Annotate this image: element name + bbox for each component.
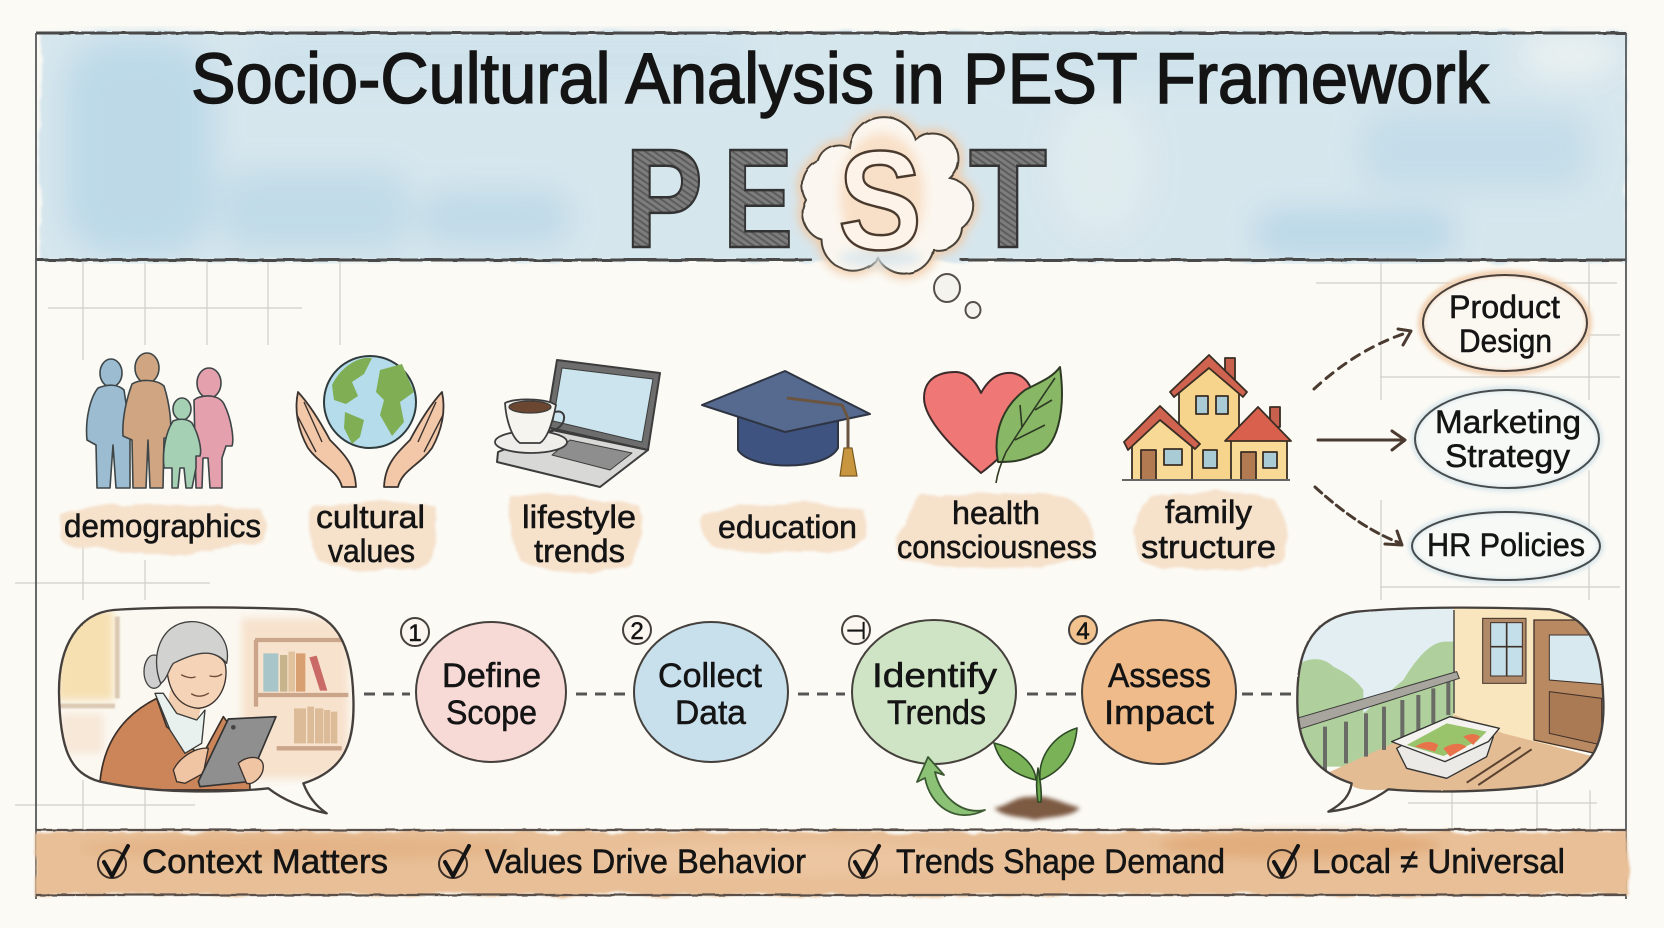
window: [1483, 618, 1526, 683]
cloud glow: [802, 117, 973, 274]
outcome: marketing strategy: Marketing: [1435, 404, 1581, 440]
icon: growth arrow: [917, 757, 985, 815]
cap board: [702, 371, 870, 432]
cup: [505, 399, 556, 443]
badge 1: 1: [408, 620, 422, 647]
outcome: hr policies: [1411, 511, 1601, 581]
step 2: collect data: Collect: [658, 657, 763, 695]
label: health consciousness: consciousness: [897, 529, 1097, 565]
step 1: define scope: Define: [442, 657, 541, 695]
laptop base: [497, 430, 648, 487]
outcome: product design: Design: [1459, 323, 1552, 359]
step 3: identify trends: [842, 616, 1016, 764]
bun and hair: [144, 655, 164, 688]
letter E: E: [723, 119, 793, 277]
label: lifestyle trends: lifestyle: [522, 499, 636, 535]
bookshelf: [255, 640, 348, 748]
hair: [157, 622, 227, 683]
takeaway: trends shape demand: Trends Shape Demand: [896, 843, 1225, 881]
step 1: define scope: Scope: [446, 694, 537, 732]
icon: family demographics: [87, 353, 233, 488]
thought cloud with S: [802, 117, 980, 318]
doors and windows: [1141, 396, 1277, 480]
badge 2: 2: [630, 618, 644, 645]
PEST wordmark: [625, 119, 1047, 277]
badge 3: [842, 616, 870, 645]
takeaway: context matters: Context Matters: [142, 843, 388, 881]
background grid sketch lines: [15, 262, 1620, 830]
step 4: assess impact: Assess: [1108, 657, 1211, 695]
arrow: to marketing strategy: [1318, 431, 1405, 450]
right leaf: [1040, 728, 1077, 780]
chopsticks: [1467, 747, 1532, 785]
arrow: to product design: [1314, 329, 1411, 389]
left hand: [173, 748, 208, 783]
leaf: [997, 367, 1062, 462]
room background: [57, 607, 357, 797]
blue person: [87, 359, 130, 488]
label: health consciousness: health: [952, 495, 1040, 531]
thought bubbles: [934, 274, 960, 302]
label: demographics: [60, 504, 264, 557]
balusters: [1325, 682, 1448, 773]
bubble outline: [59, 607, 354, 813]
child: [163, 398, 201, 488]
outcome: product design: Product: [1449, 289, 1560, 325]
step 4: assess impact: [1069, 616, 1236, 764]
continents: [332, 358, 414, 444]
arrow: to hr policies: [1315, 487, 1402, 545]
main house: [1179, 362, 1239, 480]
left house: [1132, 415, 1192, 480]
icon: globe in hands: [296, 356, 444, 487]
floor: [1330, 715, 1590, 791]
takeaway band: [34, 830, 1628, 895]
label: family structure: family: [1165, 494, 1252, 530]
saucer: [495, 431, 567, 453]
letter P: P: [625, 119, 703, 277]
outcome: marketing strategy: Strategy: [1445, 438, 1570, 474]
laptop screen: [546, 360, 660, 450]
label: health consciousness: [896, 493, 1097, 568]
label: family structure: structure: [1141, 529, 1276, 565]
right house: [1231, 440, 1287, 480]
icon: sprout: [994, 728, 1080, 820]
badge 4: 4: [1076, 618, 1090, 645]
tablet: [198, 717, 276, 787]
rail: [1297, 672, 1459, 730]
label: lifestyle trends: trends: [534, 533, 625, 569]
badge 3: ⊣: [846, 618, 866, 645]
tassel: [787, 398, 848, 448]
speech bubble: woman with tablet: [57, 607, 357, 813]
pink person: [194, 368, 233, 488]
title: Socio-Cultural Analysis in PEST Framework: [191, 40, 1489, 119]
icon: laptop and coffee: [495, 360, 660, 487]
header wash: [40, 32, 1626, 261]
globe: [324, 356, 416, 448]
chimneys: [1225, 358, 1235, 380]
header panel: [36, 31, 1626, 261]
step 2: collect data: Data: [675, 694, 746, 732]
label: education: [702, 504, 867, 552]
letter S: S: [838, 121, 922, 279]
cap base: [738, 415, 838, 466]
step 3: identify trends: Identify: [872, 657, 997, 695]
letter T: T: [969, 119, 1047, 277]
balcony scene: [1297, 607, 1610, 800]
icon: heart and leaf: [924, 367, 1062, 483]
shirt: [155, 693, 205, 753]
stem: [1036, 768, 1041, 802]
soil: [994, 796, 1080, 820]
icon: graduation cap: [702, 371, 870, 476]
door: [1533, 619, 1602, 754]
heart: [924, 372, 1032, 473]
right hand: [238, 757, 263, 784]
badge 1: [401, 618, 429, 647]
takeaway: local not universal: Local ≠ Universal: [1312, 843, 1565, 881]
speech bubble: balcony with food: [1297, 607, 1610, 812]
outcome: marketing strategy: [1414, 389, 1600, 489]
badge 2: [623, 616, 651, 645]
step 3: identify trends: Trends: [887, 694, 986, 732]
neck: [168, 690, 201, 720]
dashed process connectors: [364, 692, 1293, 696]
label: cultural values: [310, 499, 437, 571]
header border lines: [36, 33, 1626, 260]
label: education: education: [718, 509, 857, 545]
label: cultural values: cultural: [316, 499, 425, 535]
tan person: [123, 353, 171, 488]
left hand: [296, 392, 356, 487]
label: lifestyle trends: [508, 495, 641, 572]
right hand: [384, 392, 444, 487]
outcome: hr policies: HR Policies: [1427, 527, 1585, 563]
outcome: product design: [1421, 273, 1589, 373]
label: demographics: demographics: [64, 508, 261, 544]
face: [167, 652, 226, 708]
step 4: assess impact: Impact: [1104, 694, 1215, 732]
band wash: [34, 832, 1628, 895]
cloud shape: [802, 117, 973, 274]
icon: houses: [1122, 355, 1291, 480]
label: family structure: [1135, 492, 1287, 570]
label: cultural values: values: [328, 533, 415, 569]
badge 4: [1069, 616, 1097, 645]
bubble outline: [1297, 608, 1603, 812]
left leaf: [994, 743, 1036, 780]
cardigan: [100, 698, 250, 790]
step 1: define scope: [401, 618, 566, 762]
food container: [1392, 717, 1499, 778]
takeaway: values drive behavior: Values Drive Behavior: [485, 843, 806, 881]
step 2: collect data: [623, 616, 788, 762]
